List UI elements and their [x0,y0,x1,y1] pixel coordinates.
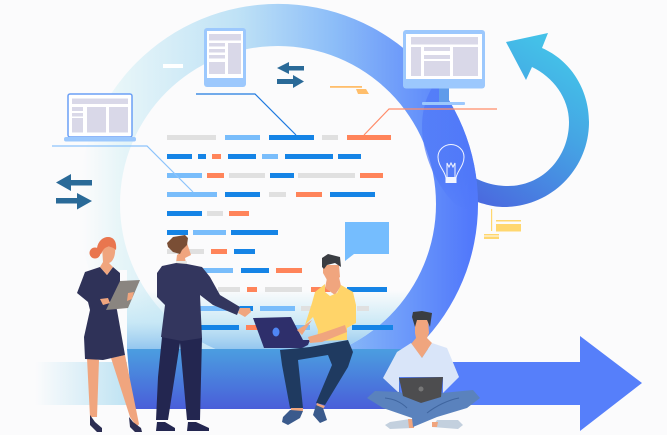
code row 3 [167,173,383,178]
neck and head [100,247,115,275]
big right arrow [400,336,642,431]
glow inside ring above band [127,296,406,349]
feet [408,419,438,428]
yellow note marks [484,209,521,239]
arms [297,320,347,343]
laptop logo [272,328,280,336]
big circular ring [98,4,478,349]
pale strip left of band [35,362,127,405]
trousers [280,340,353,408]
curved cycle arrow [466,33,589,207]
collar [176,261,187,264]
legs [87,355,139,427]
hair [97,237,116,254]
jacket [157,263,240,341]
laptop [399,377,443,403]
blue band [127,349,428,409]
neck and face [411,320,432,358]
shoes [282,405,327,425]
ring shadow under monitor [422,88,476,186]
icon: laptop [64,94,136,142]
speech bubble [345,222,389,261]
socks [385,419,463,429]
icon: tablet [204,28,246,87]
head [323,265,340,283]
code row 8 [196,268,302,273]
shoes [90,415,142,432]
code row 1 [167,135,391,140]
code row 10 [199,306,369,311]
connector line: tablet [196,94,296,135]
legs [367,390,480,427]
laptop [253,317,310,348]
hands [100,292,134,305]
white dash on ring [163,64,183,68]
code row 5 [167,211,249,216]
head [176,243,191,263]
orange note marks [330,86,369,94]
code row 4 [167,192,375,197]
code row 7 [167,249,255,254]
neck [325,277,341,295]
icon: exchange arrows top [277,62,304,88]
shoes [156,422,209,431]
code row 6 [167,230,278,235]
shirt [383,343,459,393]
tablet [106,280,140,310]
person: man in suit [156,235,251,431]
person: man sitting cross-legged [367,311,480,429]
dress [77,267,125,360]
hair [322,254,341,269]
hand [238,308,251,317]
icon: desktop monitor [403,30,485,105]
connector line: monitor [364,109,497,135]
icon: light bulb [438,144,464,183]
person: man with laptop [253,254,356,425]
ankles [291,403,325,411]
hair [167,235,188,254]
hair bun [90,248,100,258]
hair [412,311,432,327]
leg folds [385,398,459,413]
trousers [156,337,202,420]
code row 9 [199,287,387,292]
code row 2 [167,154,361,159]
person: woman with tablet [77,237,142,432]
code row 11 [201,325,393,330]
code lines block [167,135,393,330]
connector line: laptop [52,146,193,192]
laptop logo [418,386,424,392]
shirt [305,284,356,341]
icon: exchange arrows left [56,174,92,210]
